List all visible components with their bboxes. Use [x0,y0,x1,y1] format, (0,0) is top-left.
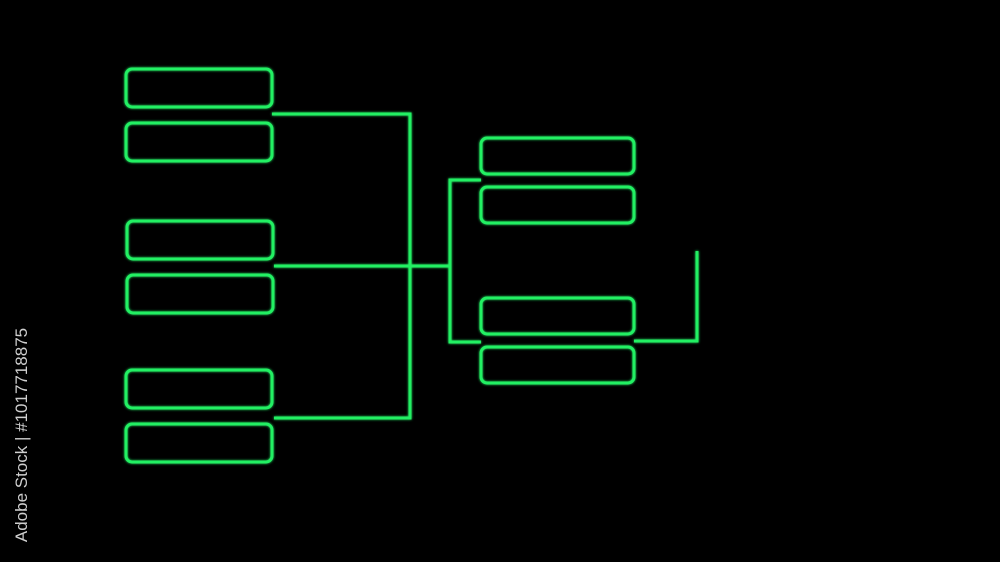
connector lines [272,114,697,418]
watermark text: Adobe Stock | #1017718875 [12,328,31,542]
left round boxes [126,69,273,462]
right round boxes [481,138,634,383]
